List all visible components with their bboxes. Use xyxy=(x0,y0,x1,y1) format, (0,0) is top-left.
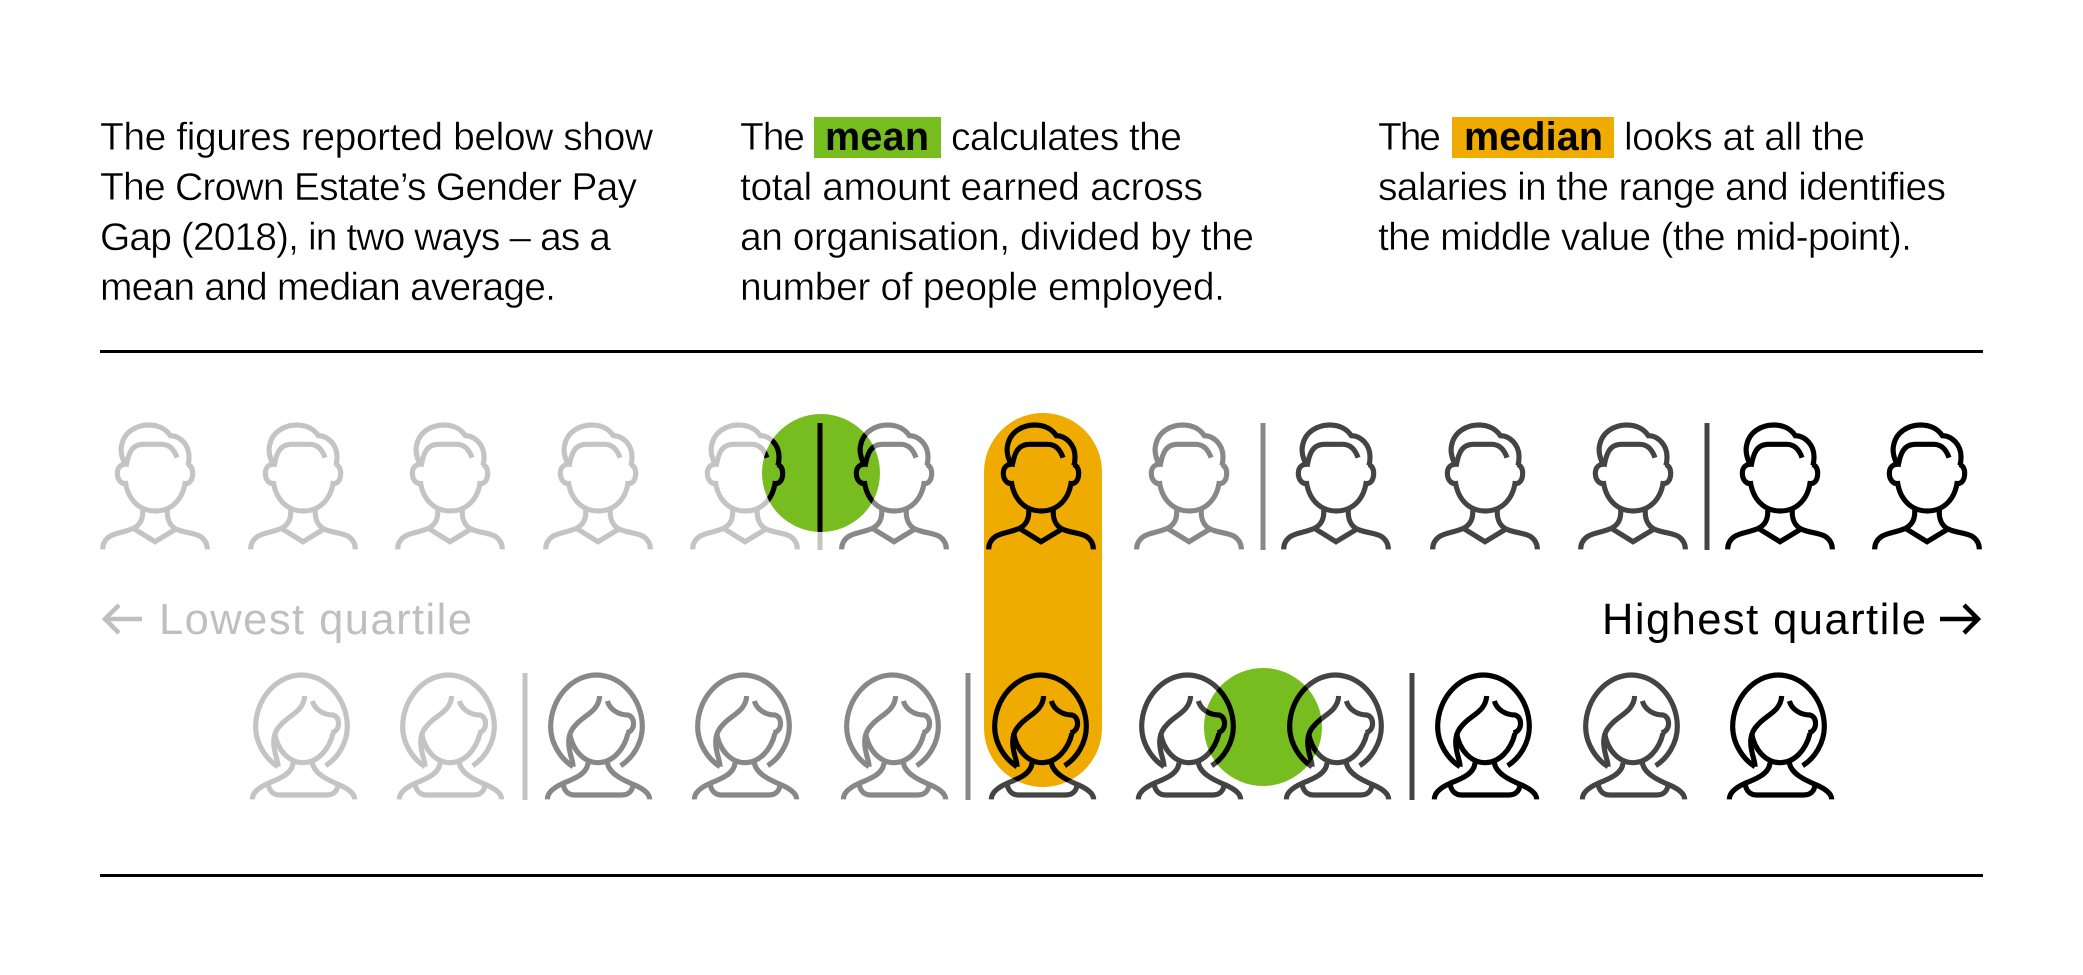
text block: mean definition xyxy=(740,115,1254,309)
median description xyxy=(1378,116,1946,259)
female quartile dividers xyxy=(522,673,1414,800)
text block: introduction: mean and median average. xyxy=(100,266,556,309)
green circle: male mean xyxy=(762,414,880,532)
median description: the middle value (the mid-point). xyxy=(1378,216,1912,259)
median description: looks at all the xyxy=(1624,116,1865,159)
icon lines inside male mean circle xyxy=(764,423,875,532)
man, lowest quartile xyxy=(693,425,797,549)
man, lowest quartile xyxy=(546,425,650,549)
woman, lowest quartile xyxy=(252,675,355,799)
man, highest quartile xyxy=(1728,425,1832,549)
man, second quartile xyxy=(989,425,1093,549)
mean description: calculates the xyxy=(951,116,1182,159)
man, third quartile xyxy=(1581,425,1685,549)
icon lines inside median pill xyxy=(989,425,1094,799)
mean description: total amount earned across xyxy=(740,166,1203,209)
top rule xyxy=(100,350,1983,353)
man, third quartile xyxy=(1433,425,1537,549)
mean highlight: mean xyxy=(825,115,929,159)
orange pill: median xyxy=(984,413,1102,787)
woman, third quartile xyxy=(1138,675,1241,799)
arrow: left xyxy=(105,605,142,633)
woman, third quartile xyxy=(991,675,1094,799)
icon lines inside female mean circle xyxy=(1206,685,1322,766)
text block: introduction xyxy=(100,116,654,309)
median highlight: median xyxy=(1464,115,1603,159)
man, second quartile xyxy=(842,425,946,549)
man, third quartile xyxy=(1284,425,1388,549)
mean description: number of people employed. xyxy=(740,266,1225,309)
text block: introduction: The figures reported below show xyxy=(100,116,654,159)
woman, highest quartile xyxy=(1434,675,1537,799)
bottom rule xyxy=(100,874,1983,877)
woman, third quartile xyxy=(1286,675,1389,799)
woman, second quartile xyxy=(694,675,797,799)
woman, second quartile xyxy=(547,675,650,799)
man, lowest quartile xyxy=(251,425,355,549)
woman, highest quartile xyxy=(1582,675,1685,799)
text block: median definition xyxy=(1378,115,1946,259)
median description: The xyxy=(1378,116,1441,159)
text block: introduction: The Crown Estate’s Gender Pay xyxy=(100,166,638,209)
woman, highest quartile xyxy=(1729,675,1832,799)
woman, second quartile xyxy=(843,675,946,799)
man, lowest quartile xyxy=(398,425,502,549)
mean description: The xyxy=(740,116,805,159)
green circle: female mean xyxy=(1204,668,1322,786)
arrow: right xyxy=(1940,605,1978,633)
mean description xyxy=(740,116,1254,309)
median description: salaries in the range and identifies xyxy=(1378,166,1946,209)
label: lowest quartile: Lowest quartile xyxy=(159,596,472,644)
text block: introduction: Gap (2018), in two ways – as a xyxy=(100,216,611,259)
row of male icons xyxy=(103,425,1979,549)
man, highest quartile xyxy=(1875,425,1979,549)
label: highest quartile: Highest quartile xyxy=(1602,596,1926,644)
row of female icons xyxy=(252,675,1832,799)
man, second quartile xyxy=(1137,425,1241,549)
mean description: an organisation, divided by the xyxy=(740,216,1254,259)
woman, lowest quartile xyxy=(399,675,502,799)
male quartile dividers xyxy=(818,423,1710,550)
man, lowest quartile xyxy=(103,425,207,549)
